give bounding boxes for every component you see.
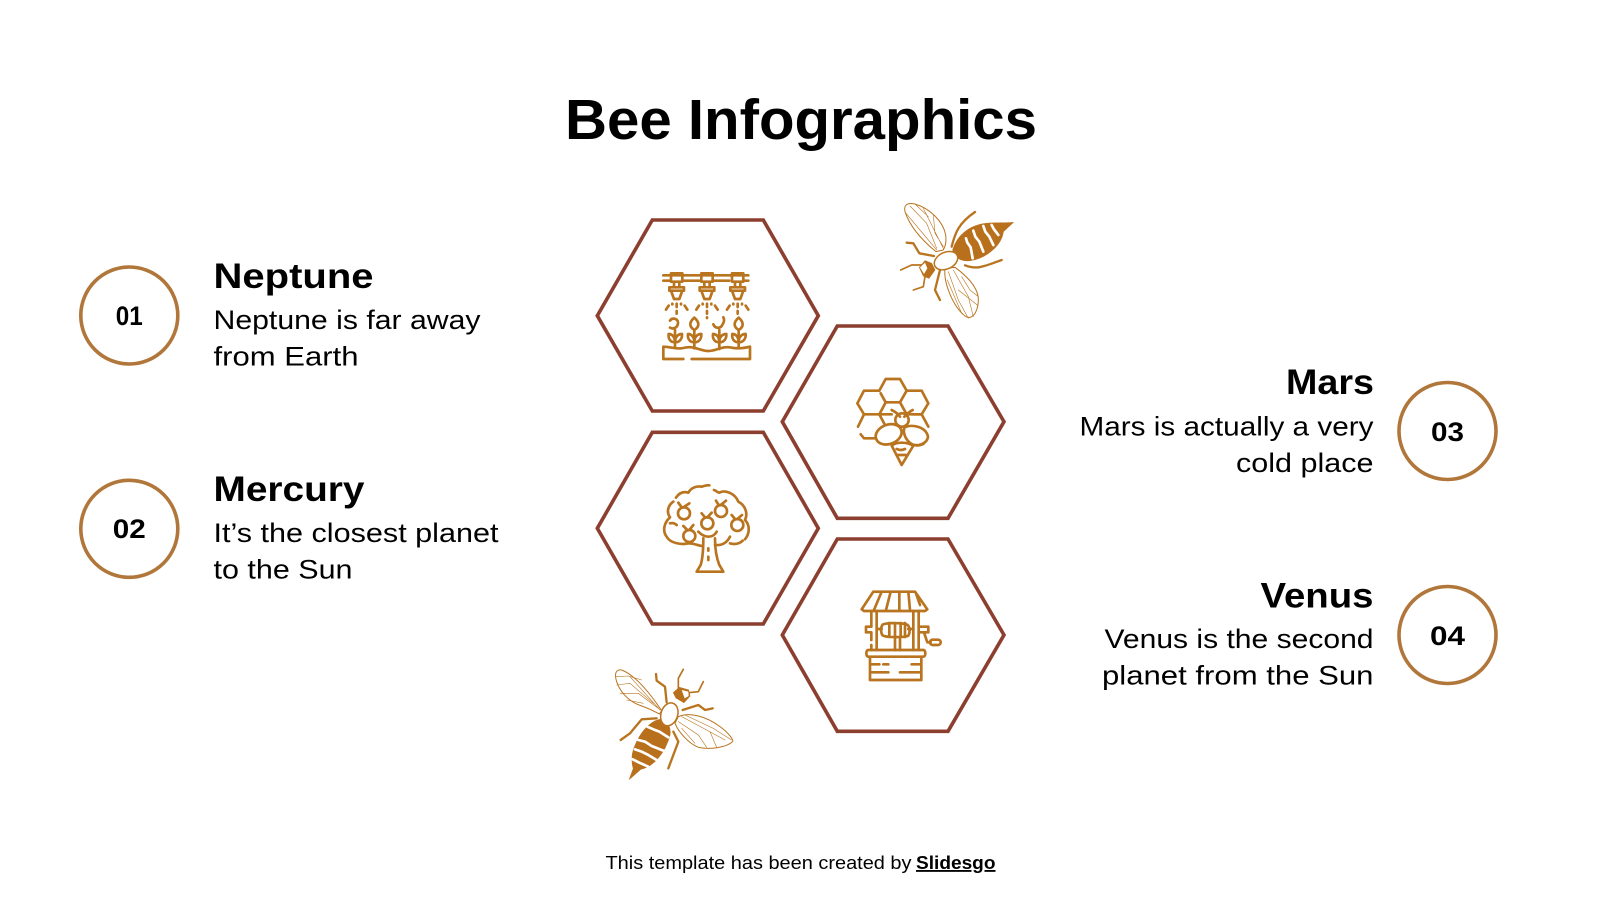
icon: sprinklers and plants [663, 273, 750, 359]
description: Mercury: It’s the closest planet [214, 518, 499, 548]
bee head [919, 261, 935, 278]
footer credit: This template has been created by [606, 852, 912, 873]
bee wings [905, 204, 978, 318]
description: Neptune: from Earth [214, 342, 358, 372]
title: Bee Infographics [565, 88, 1037, 152]
description: Venus [1102, 624, 1374, 690]
description: Mars: Mars is actually a very [1080, 412, 1374, 442]
bee abdomen [629, 719, 670, 779]
number badge 04: 04 [1430, 621, 1465, 651]
hexagon 2: honeycomb [782, 326, 1004, 518]
heading: Neptune: Neptune [214, 257, 374, 296]
panel: item 01 Neptune [81, 257, 481, 372]
bee legs and antennae [901, 212, 1002, 300]
icon: apple tree [664, 485, 749, 572]
description: Neptune: Neptune is far away [214, 305, 481, 335]
bee: bottom left [615, 669, 733, 779]
hexagon 3: fruit tree [597, 432, 818, 624]
bee legs and antennae [621, 669, 713, 768]
number badge 02: 02 [113, 514, 146, 544]
bee head [673, 687, 690, 703]
description: Mercury [214, 518, 499, 584]
footer credit: Slidesgo [916, 852, 996, 873]
panel: item 03 Mars [1080, 363, 1496, 480]
panel: item 02 Mercury [81, 470, 499, 584]
hexagon 4: water well [782, 539, 1004, 731]
description: Mars: cold place [1236, 448, 1374, 478]
panel: item 04 Venus [1102, 576, 1496, 690]
description: Mercury: to the Sun [214, 554, 352, 584]
description: Venus: Venus is the second [1104, 624, 1374, 654]
heading: Mercury: Mercury [214, 470, 365, 509]
hexagon 1: irrigation [597, 220, 818, 411]
heading: Mars: Mars [1286, 363, 1374, 402]
number badge 02 [81, 480, 178, 577]
description: Neptune [214, 305, 481, 372]
number badge 04 [1399, 586, 1496, 684]
number badge 03 [1399, 382, 1496, 480]
icon: honeycomb with bee [857, 379, 928, 465]
bee abdomen [953, 222, 1013, 261]
bee thorax [658, 701, 681, 728]
number badge 01: 01 [116, 301, 143, 331]
number badge 01 [81, 267, 178, 364]
description: Mars [1080, 412, 1374, 478]
heading: Venus: Venus [1260, 576, 1374, 616]
number badge 03: 03 [1431, 417, 1464, 447]
icon: wishing well [862, 592, 941, 680]
description: Venus: planet from the Sun [1102, 660, 1374, 690]
bee wings [615, 670, 733, 748]
bee thorax [931, 248, 961, 273]
bee: top right [901, 204, 1013, 318]
